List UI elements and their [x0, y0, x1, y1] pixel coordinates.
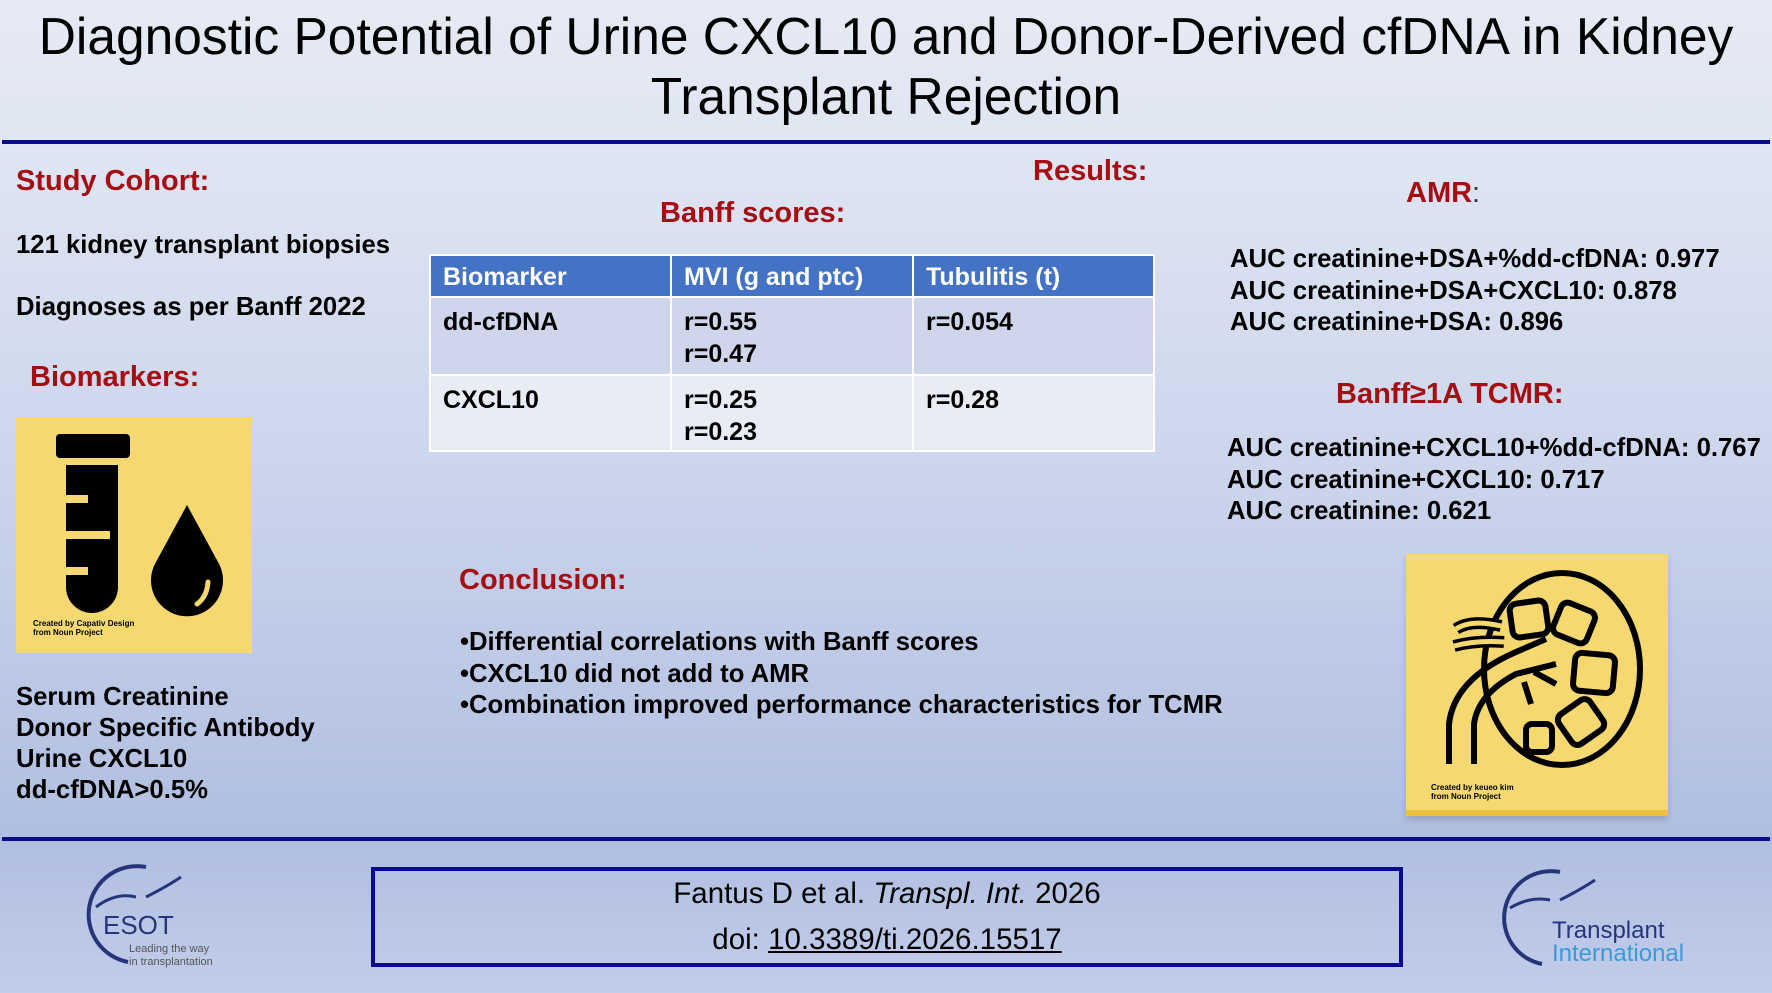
logo: Transplant International: International: [1552, 940, 1684, 967]
text: cohort: [16, 231, 390, 321]
table: banff correlations: r=0.054: [926, 308, 1013, 336]
heading: study cohort: Study Cohort:: [16, 165, 209, 197]
citation box: [371, 867, 1403, 967]
table: banff correlations: Biomarker: [443, 263, 567, 291]
text: biomarker list: [16, 683, 315, 804]
table: banff correlations: r=0.25: [684, 386, 757, 414]
table: banff correlations: CXCL10: [443, 386, 539, 414]
heading: conclusion: Conclusion:: [459, 564, 627, 596]
text: AMR AUCs: AUC creatinine+DSA+CXCL10: 0.878: [1230, 276, 1677, 304]
icon: test tube and drop: from Noun Project: [33, 628, 103, 637]
logo: ESOT: Leading the way: [129, 943, 210, 955]
citation box: Fantus D et al. Transpl. Int. 2026: [673, 877, 1101, 910]
icon: kidney: [1406, 554, 1668, 816]
table: banff correlations: r=0.28: [926, 386, 999, 414]
text: TCMR AUCs: AUC creatinine+CXCL10: 0.717: [1227, 466, 1605, 494]
logo: ESOT: in transplantation: [129, 956, 213, 968]
icon: test tube and drop: [16, 417, 252, 653]
text: biomarker list: Donor Specific Antibody: [16, 714, 315, 742]
title: Diagnostic Potential of Urine CXCL10 and Donor-Derived cfDNA in Kidney: [39, 7, 1733, 65]
text: biomarker list: Serum Creatinine: [16, 683, 229, 711]
table: banff correlations: MVI (g and ptc): [684, 263, 863, 291]
logo: ESOT: ESOT: [103, 910, 174, 940]
table: banff correlations: r=0.23: [684, 418, 757, 446]
table: banff correlations: r=0.55: [684, 308, 757, 336]
heading: results: Results:: [1033, 155, 1147, 187]
text: conclusion bullets: •Combination improved performance characteristics for TCMR: [460, 691, 1223, 719]
heading: biomarkers: Biomarkers:: [30, 361, 199, 393]
table: banff correlations: Tubulitis (t): [926, 263, 1060, 291]
text: cohort: Diagnoses as per Banff 2022: [16, 293, 366, 321]
text: cohort: 121 kidney transplant biopsies: [16, 231, 390, 259]
text: conclusion bullets: [460, 628, 1223, 719]
icon: test tube and drop: Created by Capativ Design: [33, 619, 134, 628]
text: biomarker list: Urine CXCL10: [16, 745, 187, 773]
icon: kidney: from Noun Project: [1431, 792, 1501, 801]
citation box: doi: 10.3389/ti.2026.15517: [712, 923, 1062, 956]
table: banff correlations: [429, 254, 1155, 452]
heading: TCMR: Banff≥1A TCMR:: [1336, 378, 1563, 410]
text: AMR AUCs: AUC creatinine+DSA: 0.896: [1230, 308, 1563, 336]
text: biomarker list: dd-cfDNA>0.5%: [16, 776, 208, 804]
title: Transplant Rejection: [651, 67, 1121, 125]
title: [39, 7, 1734, 125]
text: TCMR AUCs: AUC creatinine+CXCL10+%dd-cfDNA: 0.767: [1227, 434, 1761, 462]
logo: Transplant International: Transplant: [1552, 917, 1665, 944]
logo: Transplant International: [1502, 869, 1684, 967]
text: AMR AUCs: [1230, 245, 1720, 336]
icon: kidney: Created by keueo kim: [1431, 783, 1514, 792]
heading: banff scores: Banff scores:: [660, 197, 845, 229]
text: conclusion bullets: •CXCL10 did not add to AMR: [460, 660, 809, 688]
table: banff correlations: r=0.47: [684, 340, 757, 368]
text: TCMR AUCs: AUC creatinine: 0.621: [1227, 497, 1491, 525]
table: banff correlations: dd-cfDNA: [443, 308, 558, 336]
heading: AMR: AMR:: [1406, 177, 1480, 209]
logo: ESOT: [86, 864, 213, 968]
text: AMR AUCs: AUC creatinine+DSA+%dd-cfDNA: 0.977: [1230, 245, 1720, 273]
text: TCMR AUCs: [1227, 434, 1761, 525]
text: conclusion bullets: •Differential correlations with Banff scores: [460, 628, 979, 656]
